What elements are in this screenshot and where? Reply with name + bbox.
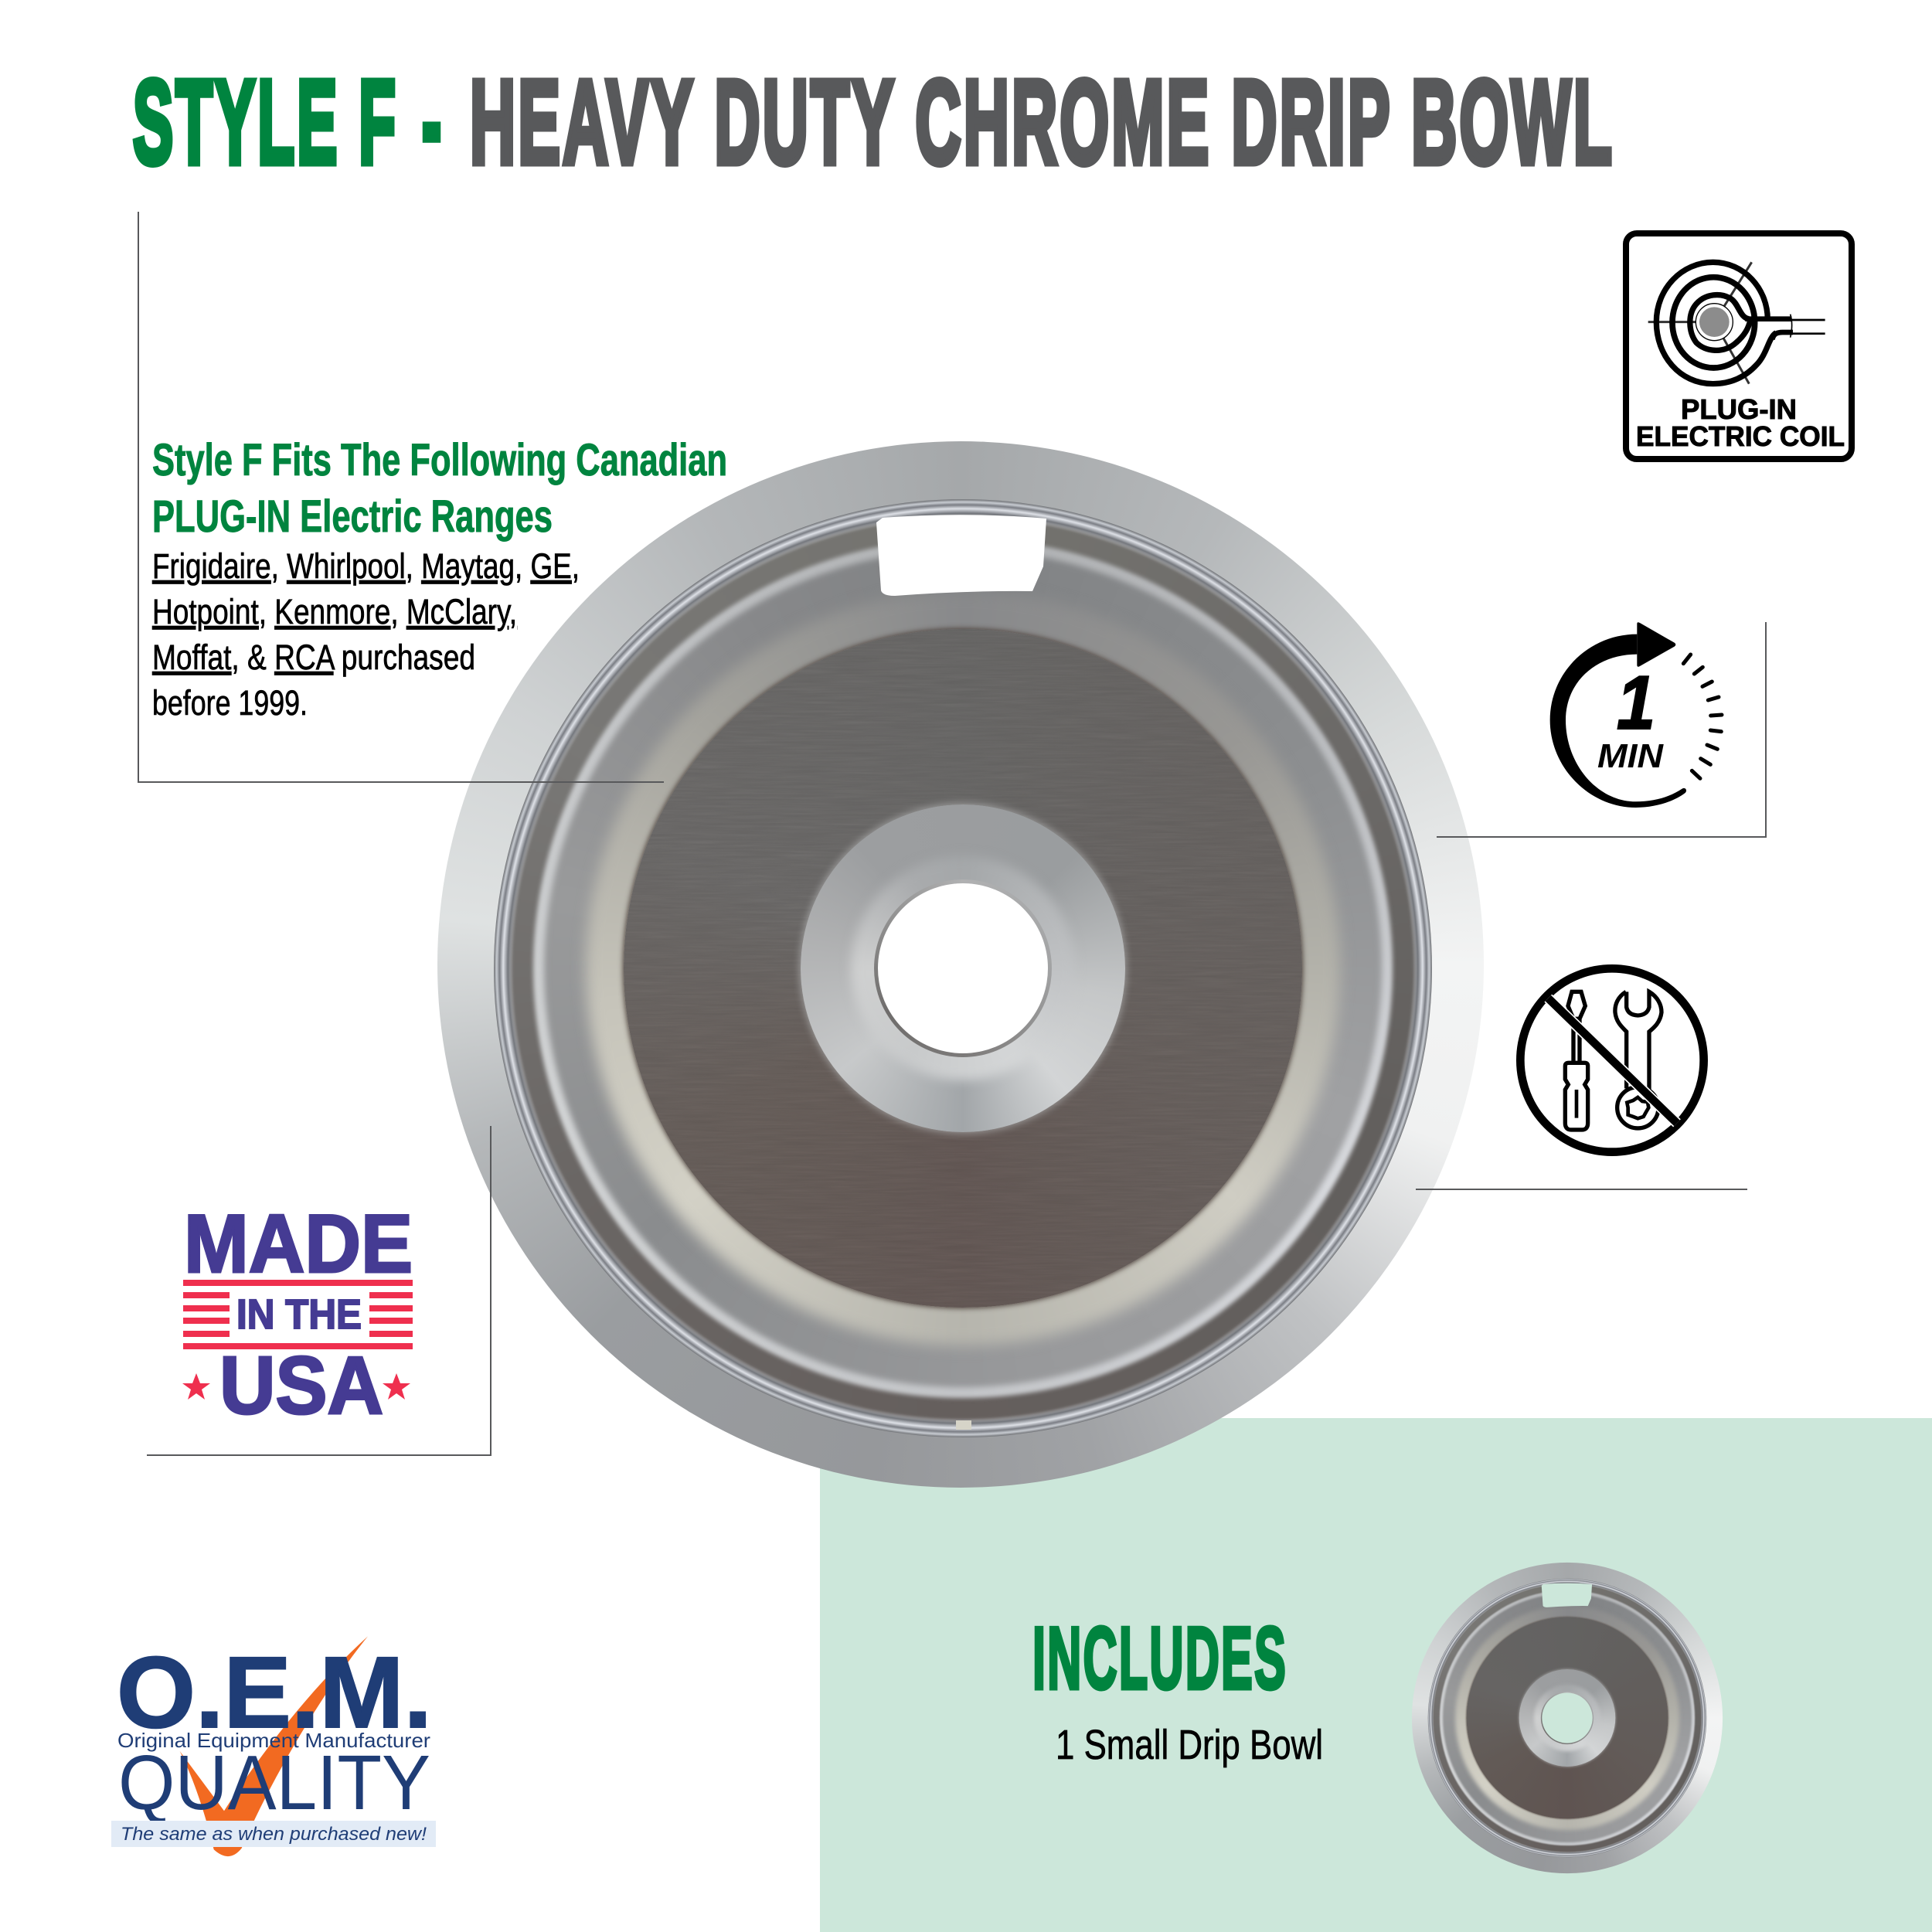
logo: o.e.m. quality bbox=[111, 1635, 436, 1856]
heading: fits ranges: Style F Fits The Following Canadian bbox=[152, 435, 727, 485]
logo: made in the usa: MADE bbox=[184, 1197, 413, 1290]
callout line: made in usa bbox=[147, 1126, 491, 1455]
heading: includes: INCLUDES bbox=[1032, 1610, 1287, 1708]
icon: plug-in electric coil badge bbox=[1626, 233, 1852, 459]
callout line: no tools bbox=[1416, 1189, 1747, 1190]
title bbox=[133, 56, 1614, 189]
text block: compatible brands bbox=[152, 546, 580, 723]
icon: 1 minute timer bbox=[1550, 622, 1722, 808]
title: STYLE F bbox=[133, 56, 398, 189]
panel: includes background bbox=[820, 1418, 1932, 1932]
icon: 1 minute timer: 1 bbox=[1617, 660, 1655, 745]
logo: o.e.m. quality: QUALITY bbox=[118, 1740, 430, 1826]
text block: compatible brands: Hotpoint, Kenmore, McClary, bbox=[152, 592, 517, 631]
callout line: compatibility bbox=[138, 212, 664, 782]
product photo: small chrome drip bowl bbox=[1412, 1563, 1723, 1873]
callout line: install time bbox=[1437, 622, 1766, 837]
heading: fits ranges bbox=[152, 435, 727, 542]
logo: made in the usa: USA bbox=[219, 1340, 383, 1431]
icon: no tools required bbox=[1520, 968, 1704, 1152]
logo: o.e.m. quality: O.E.M. bbox=[117, 1635, 432, 1749]
text block: compatible brands: Moffat, & RCA purchased bbox=[152, 638, 475, 677]
product photo: large chrome drip bowl bbox=[437, 441, 1484, 1488]
icon: plug-in electric coil badge: ELECTRIC COIL bbox=[1636, 420, 1845, 452]
text block: compatible brands: Frigidaire, Whirlpool, Maytag, GE, bbox=[152, 546, 580, 586]
logo: o.e.m. quality: Original Equipment Manufacturer bbox=[117, 1729, 430, 1752]
title: - bbox=[422, 56, 444, 189]
text block: compatible brands: before 1999. bbox=[152, 683, 308, 723]
logo: made in the usa: IN THE bbox=[236, 1291, 362, 1338]
heading: fits ranges: PLUG-IN Electric Ranges bbox=[152, 492, 553, 542]
icon: plug-in electric coil badge: PLUG-IN bbox=[1681, 393, 1797, 425]
icon: 1 minute timer: MIN bbox=[1597, 737, 1664, 775]
logo: o.e.m. quality: The same as when purchased new! bbox=[121, 1824, 427, 1845]
text block: included item: 1 Small Drip Bowl bbox=[1056, 1722, 1323, 1768]
logo: made in the usa bbox=[182, 1197, 413, 1431]
